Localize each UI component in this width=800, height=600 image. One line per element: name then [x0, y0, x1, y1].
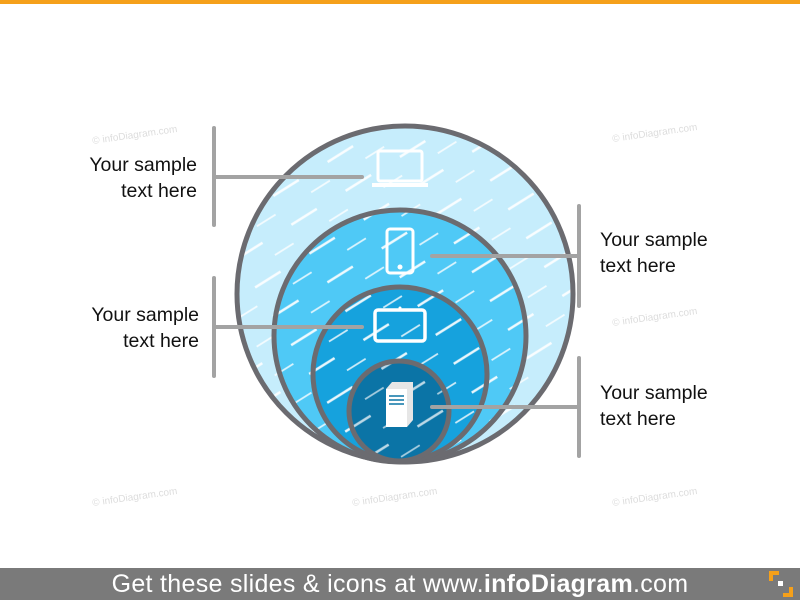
icon: laptop [372, 151, 428, 185]
text: right top: Your sample [600, 229, 708, 251]
watermarks: © infoDiagram.com [92, 124, 178, 147]
circle 3 [313, 287, 487, 461]
text: right bottom [600, 382, 708, 430]
footer [0, 568, 800, 600]
text: left top: Your sample [89, 154, 197, 176]
watermarks: © infoDiagram.com [612, 486, 698, 509]
circle 4 inner [349, 361, 449, 461]
footer logo [769, 571, 793, 597]
text: right bottom: Your sample [600, 382, 708, 404]
top orange bar [0, 0, 800, 4]
watermarks: © infoDiagram.com [92, 486, 178, 509]
icon: tablet [375, 306, 425, 341]
text: left middle: text here [123, 330, 199, 352]
circle 1 outer [237, 126, 573, 462]
footer: Get these slides & icons at www.infoDiagram.com [112, 570, 688, 598]
icon: phone [387, 229, 413, 273]
text: left middle: Your sample [91, 304, 199, 326]
watermarks: © infoDiagram.com [352, 486, 438, 509]
text: right bottom: text here [600, 408, 676, 430]
text: right top: text here [600, 255, 676, 277]
text: left top: text here [121, 180, 197, 202]
icon: server [386, 382, 413, 427]
connectors [214, 128, 579, 456]
text: left middle [91, 304, 199, 352]
watermarks: © infoDiagram.com [612, 122, 698, 145]
watermarks: © infoDiagram.com [612, 306, 698, 329]
text: right top [600, 229, 708, 277]
circle 2 [274, 210, 526, 462]
text: left top [89, 154, 197, 202]
